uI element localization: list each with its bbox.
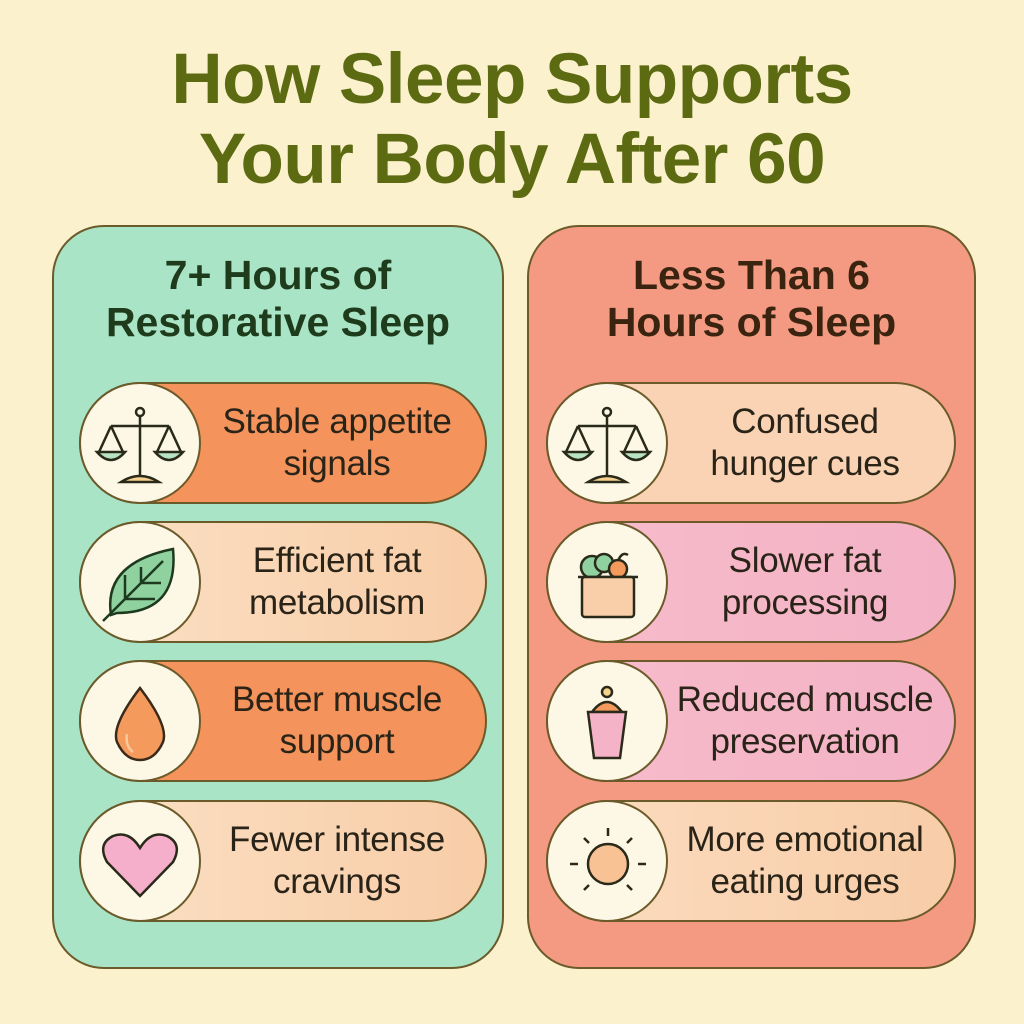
icon: cup bbox=[546, 660, 668, 782]
item: fewer cravings bbox=[79, 800, 487, 922]
item: efficient fat: Efficient fat bbox=[253, 541, 421, 580]
icon: sun bbox=[546, 800, 668, 922]
item: efficient fat: metabolism bbox=[249, 583, 425, 622]
heading: less than 6: Less Than 6 bbox=[633, 252, 870, 298]
heading: 7+ hours: Restorative Sleep bbox=[106, 299, 450, 345]
item: better muscle: Better muscle bbox=[232, 680, 442, 719]
item: slower fat bbox=[546, 521, 956, 643]
item: better muscle bbox=[79, 660, 487, 782]
item: confused hunger: hunger cues bbox=[710, 444, 900, 483]
icon: leaf bbox=[79, 521, 201, 643]
item: emotional eating: eating urges bbox=[710, 862, 900, 901]
item: reduced muscle: preservation bbox=[710, 722, 900, 761]
item: better muscle: support bbox=[280, 722, 394, 761]
title: Your Body After 60 bbox=[199, 120, 825, 199]
item: confused hunger: Confused bbox=[731, 402, 879, 441]
panel: 7+ hours bbox=[52, 225, 504, 969]
item: confused hunger bbox=[546, 382, 956, 504]
icon: basket bbox=[546, 521, 668, 643]
item: fewer cravings: cravings bbox=[273, 862, 401, 901]
item: reduced muscle: Reduced muscle bbox=[677, 680, 933, 719]
icon: scale bbox=[79, 382, 201, 504]
heading: 7+ hours: 7+ Hours of bbox=[165, 252, 391, 298]
item: stable appetite: signals bbox=[284, 444, 390, 483]
item: stable appetite: Stable appetite bbox=[222, 402, 452, 441]
item: emotional eating bbox=[546, 800, 956, 922]
item: reduced muscle bbox=[546, 660, 956, 782]
item: slower fat: Slower fat bbox=[729, 541, 881, 580]
item: emotional eating: More emotional bbox=[686, 820, 924, 859]
title bbox=[171, 40, 853, 199]
icon: heart bbox=[79, 800, 201, 922]
item: efficient fat bbox=[79, 521, 487, 643]
heading: less than 6: Hours of Sleep bbox=[607, 299, 896, 345]
icon: scale bbox=[546, 382, 668, 504]
heading: less than 6 bbox=[607, 252, 896, 345]
heading: 7+ hours bbox=[106, 252, 450, 345]
title: How Sleep Supports bbox=[171, 40, 853, 119]
panel: less than 6 hours bbox=[527, 225, 976, 969]
item: slower fat: processing bbox=[722, 583, 888, 622]
item: fewer cravings: Fewer intense bbox=[229, 820, 445, 859]
item: stable appetite bbox=[79, 382, 487, 504]
icon: drop bbox=[79, 660, 201, 782]
